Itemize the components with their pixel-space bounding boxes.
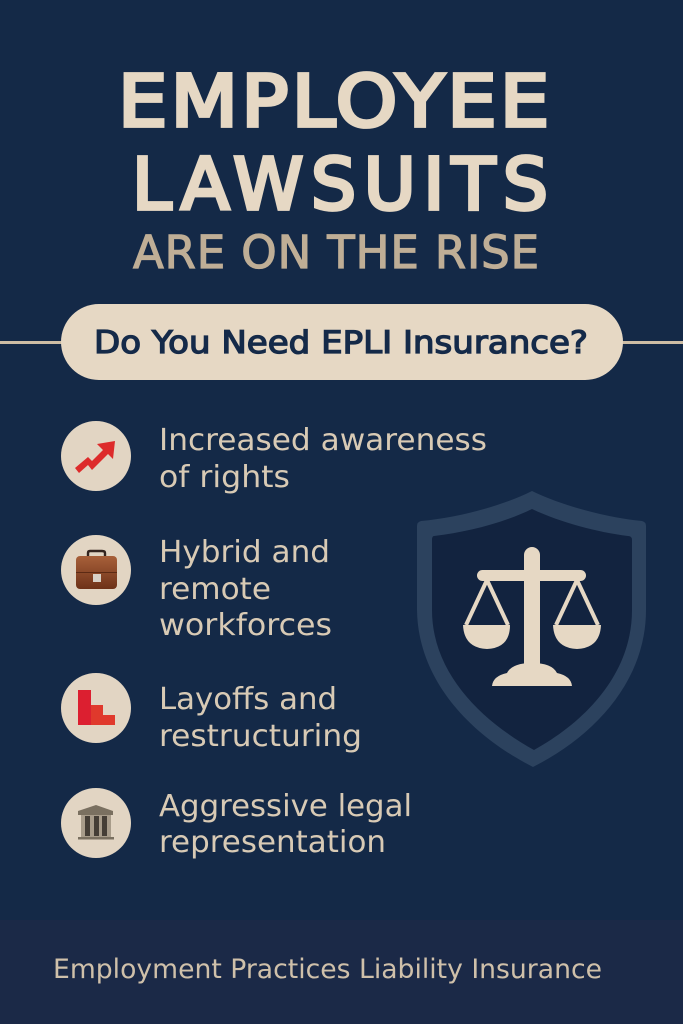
- divider lines: [0, 341, 683, 344]
- item: hybrid: Hybrid and: [159, 535, 330, 570]
- item: layoffs: restructuring: [159, 719, 362, 754]
- item: hybrid: remote: [159, 572, 271, 607]
- title: ARE ON THE RISE: [133, 226, 539, 279]
- question pill: [61, 304, 623, 380]
- icon: falling bars: [61, 673, 131, 743]
- item: legal: [61, 788, 412, 860]
- item: legal: representation: [159, 825, 386, 860]
- scales: [463, 547, 601, 686]
- icon: briefcase: [61, 535, 131, 605]
- item: legal: Aggressive legal: [159, 789, 412, 824]
- footer band: [0, 920, 683, 1024]
- question pill: Do You Need EPLI Insurance?: [94, 325, 588, 361]
- item: awareness: Increased awareness: [159, 423, 487, 458]
- item: awareness: of rights: [159, 460, 290, 495]
- shield: [417, 491, 646, 767]
- shield with scales: [417, 491, 646, 767]
- item: layoffs: Layoffs and: [159, 682, 337, 717]
- title: [118, 60, 549, 279]
- item: layoffs: [61, 673, 362, 754]
- title: LAWSUITS: [132, 143, 548, 226]
- item: hybrid: [61, 535, 332, 643]
- icon: courthouse: [61, 788, 131, 858]
- icon: rising arrow: [61, 421, 131, 491]
- title: EMPLOYEE: [118, 60, 549, 143]
- item: awareness: [61, 421, 487, 495]
- footer text: Employment Practices Liability Insurance: [53, 954, 602, 985]
- item: hybrid: workforces: [159, 608, 332, 643]
